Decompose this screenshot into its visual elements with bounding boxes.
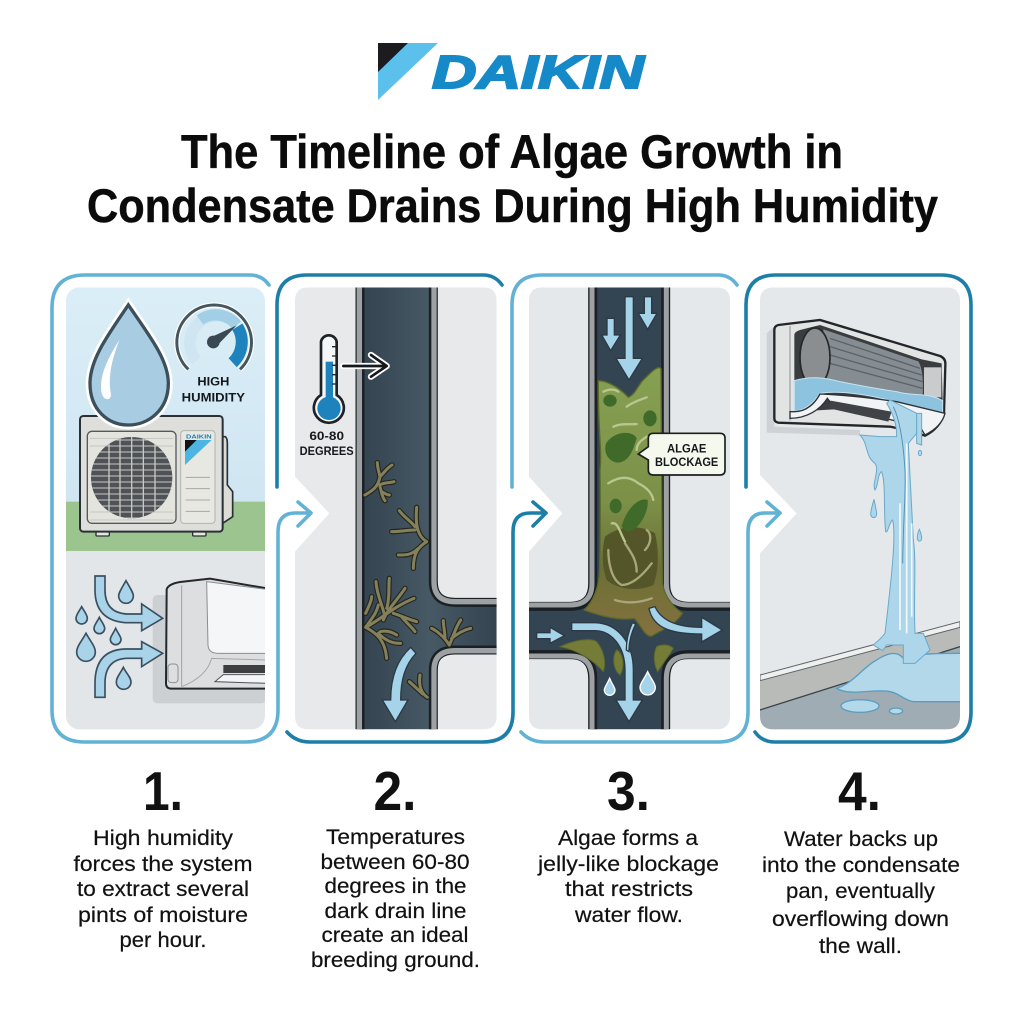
algae mass [560,368,682,675]
flow arrow [382,647,416,722]
step 1 text: pints of moisture [78,904,248,927]
title: Condensate Drains During High Humidity [87,179,938,232]
step 4 text: 4. [838,760,881,822]
label: 60-80 degrees [300,429,354,458]
junction pipe [528,287,732,729]
indoor unit [166,579,267,689]
icons: droplets [76,581,133,689]
floor and baseboard [760,622,960,730]
arrows: moist air into indoor unit [95,576,163,697]
frame 1 with arrow [52,275,311,742]
frame 4 [746,275,971,742]
algae tendrils [365,463,471,697]
label: 60-80 degrees: DEGREES [300,444,354,458]
panel 1: high humidity [66,287,267,731]
label: high humidity: HIGH [197,375,229,389]
logo: Daikin [378,43,645,100]
callout: algae blockage: ALGAE [667,442,706,456]
step 3 text: water flow. [574,904,683,927]
icon: overflowing indoor unit [767,320,945,436]
step 3 text: Algae forms a [558,827,698,850]
step 2 text: 2. [374,760,416,822]
floor puddle [837,653,963,714]
step 4 text: into the condensate [762,854,960,877]
step 1 text: 1. [143,760,183,822]
title [87,125,938,232]
icon: outdoor unit [80,416,233,536]
step 4 text: the wall. [819,935,902,958]
arrows: restricted flow at junction [537,607,722,722]
step 2 text: breeding ground. [311,949,480,972]
step 2 text: degrees in the [324,875,466,898]
step 3 text: jelly-like blockage [537,853,719,876]
step 2 text: Temperatures [326,826,465,849]
drain pipe [359,287,500,729]
step 1 text: High humidity [93,827,234,850]
step 4 text: overflowing down [772,908,949,931]
frame 3 top [512,275,737,487]
step 3 text: 3. [607,760,650,822]
step 3 text [537,760,719,927]
icon: outdoor unit: DAIKIN [186,434,212,440]
step 4 text [762,760,960,958]
connector frames and arrows [52,275,971,742]
step 2 text [311,760,480,972]
icon: thermometer [314,335,344,423]
callout: algae blockage [638,433,725,475]
callout: algae blockage: BLOCKAGE [655,455,718,469]
step 2 text: dark drain line [324,900,466,923]
step 4 text: Water backs up [784,828,938,851]
arrows: flow above blockage [602,297,657,380]
water stream down wall [860,400,930,663]
step 2 text: create an ideal [322,924,468,947]
step 3 text: that restricts [565,878,693,901]
step 1 text: forces the system [74,853,253,876]
label: high humidity: HUMIDITY [182,391,246,405]
step 1 text: to extract several [77,878,249,901]
label: high humidity [182,375,246,405]
step 1 text [74,760,253,952]
icon: water drop [90,305,168,425]
step 4 text: pan, eventually [786,880,936,903]
label: 60-80 degrees: 60-80 [309,429,344,443]
step 1 text: per hour. [120,929,206,952]
icon: humidity gauge [177,305,251,369]
logo: Daikin: DAIKIN [432,46,645,98]
frame 3 bottom with arrow [521,502,780,742]
frame 2 bottom with arrow [287,502,546,742]
frame 2 top [277,275,502,487]
panel 4: overflow down the wall [758,287,963,730]
title: The Timeline of Algae Growth in [181,125,843,178]
arrow: temperature into pipe [343,355,387,377]
step 2 text: between 60-80 [320,851,470,874]
panel 2: ideal temperature in dark drain line [293,287,500,730]
icons: droplets [604,672,655,695]
panel 3: algae blockage [528,287,732,730]
